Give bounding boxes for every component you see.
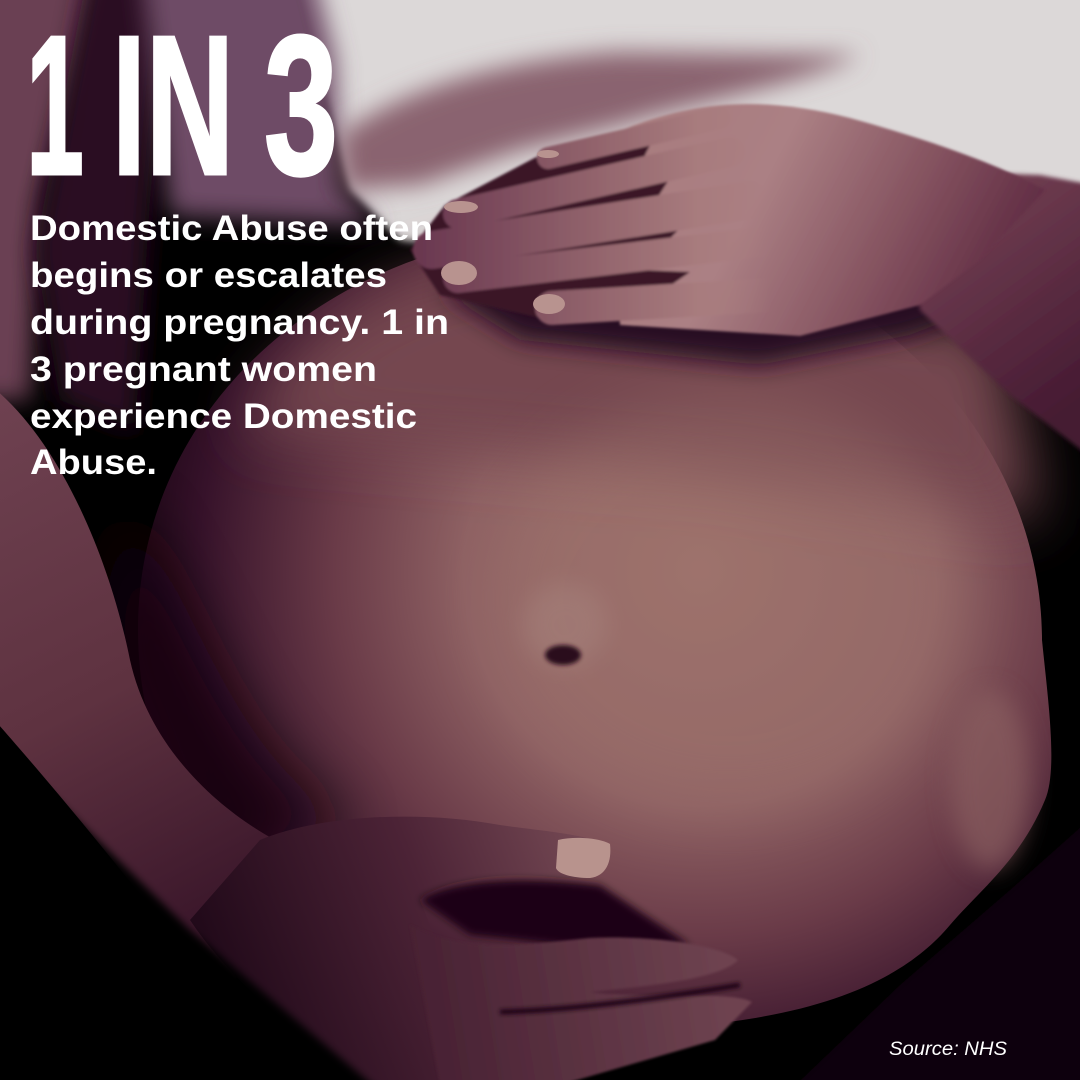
back of hand	[610, 104, 1045, 336]
left side skin	[0, 0, 110, 400]
lower hand	[190, 817, 610, 1080]
fold shadow in top	[340, 52, 860, 190]
body text block: during pregnancy. 1 in	[30, 303, 449, 342]
little finger	[552, 295, 770, 308]
lower hand finger gaps	[500, 985, 740, 1012]
navel	[523, 583, 607, 667]
dark base between fingers	[410, 125, 690, 320]
lower fingers	[410, 925, 752, 1080]
belly	[138, 230, 1051, 1030]
belly left shadow	[100, 500, 350, 900]
small finger	[548, 118, 720, 158]
top hand	[410, 104, 1045, 336]
right flank glow	[950, 690, 1030, 870]
ring finger	[458, 242, 760, 278]
waist fabric and dark lower right	[780, 810, 1080, 1080]
index finger	[458, 152, 730, 214]
bottom edge shadow	[0, 725, 390, 1080]
digit 1: 1	[26, 0, 84, 217]
shadow under top hand	[440, 260, 1000, 365]
belly highlight	[490, 390, 970, 810]
fingernails top hand	[441, 150, 565, 314]
white top	[290, 0, 1080, 260]
body text block	[30, 209, 449, 482]
body text block: Abuse.	[30, 443, 157, 482]
dark gap beside torso	[35, 0, 170, 430]
body text block: 3 pregnant women	[30, 350, 377, 389]
middle finger	[432, 200, 750, 250]
body text block: experience Domestic	[30, 397, 417, 436]
mauve fabric behind title	[140, 0, 380, 225]
digit 3: 3	[264, 0, 338, 217]
right forearm	[900, 170, 1080, 480]
word IN: IN	[112, 0, 234, 217]
source credit: Source: NHS	[889, 1039, 1007, 1060]
body text block: Domestic Abuse often	[30, 209, 433, 248]
belly upper fill	[240, 260, 1040, 520]
body text block: begins or escalates	[30, 256, 387, 295]
title: 1 IN 3	[26, 0, 338, 217]
gap below thumb	[420, 880, 690, 945]
left arm	[0, 385, 275, 1000]
thumbnail	[556, 838, 610, 878]
